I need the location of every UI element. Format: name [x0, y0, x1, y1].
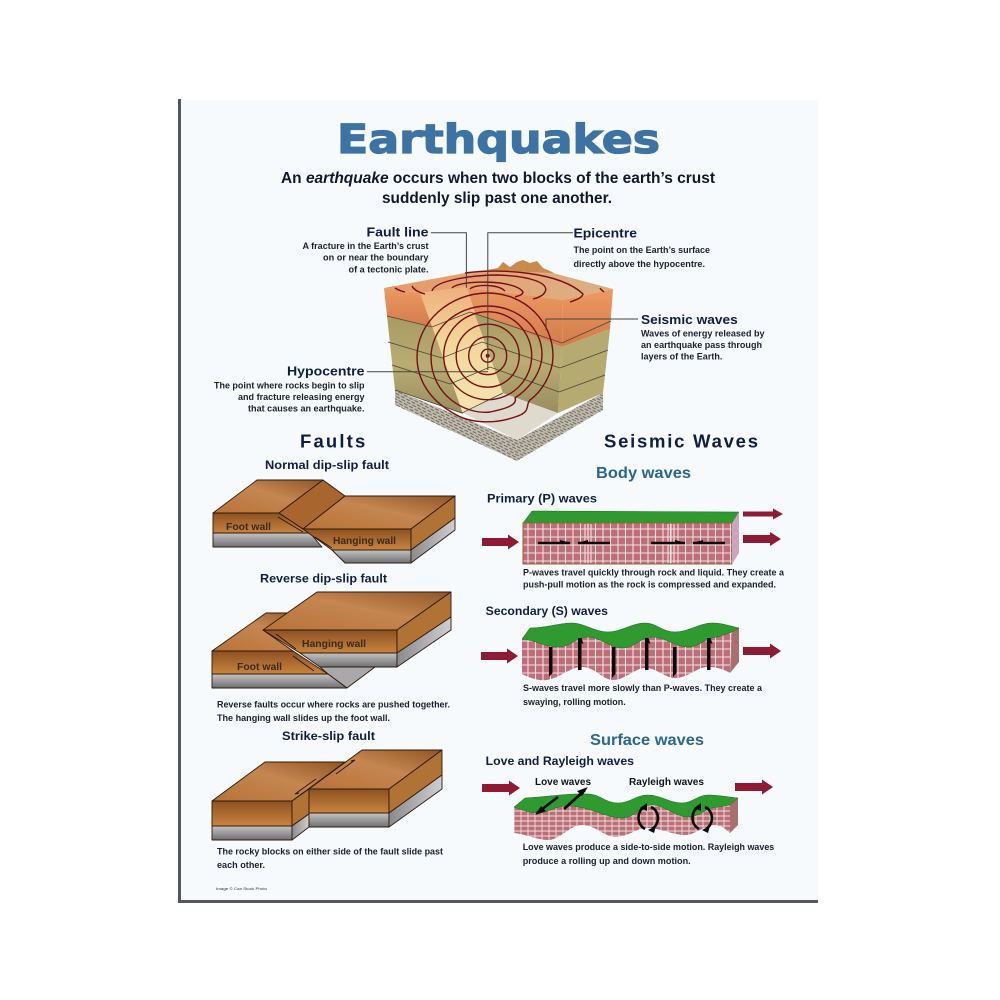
reverse dip-slip fault diagram	[212, 592, 451, 688]
bottom bedrock layer	[395, 390, 603, 461]
poster panel	[178, 99, 818, 903]
fault line callout: of a tectonic plate.	[348, 264, 428, 275]
hypocentre callout: and fracture releasing energy	[238, 392, 365, 403]
output arrow bottom	[743, 532, 781, 546]
input arrow	[481, 648, 518, 664]
hypocentre callout: Hypocentre	[287, 364, 364, 379]
output arrow	[743, 644, 781, 658]
fault line callout	[302, 225, 466, 288]
mountains on cube surface	[470, 260, 562, 286]
cube surface	[384, 270, 613, 300]
left outer wall	[384, 288, 463, 414]
P-wave description: push-pull motion as the rock is compressed and expanded.	[523, 580, 776, 591]
earthquake cube diagram	[384, 260, 613, 461]
hypocentre callout	[214, 364, 488, 415]
output arrow top	[743, 508, 783, 520]
seismic waves callout: Seismic waves	[641, 312, 738, 327]
reverse fault description: Reverse faults occur where rocks are pushed together.	[217, 700, 450, 711]
fault line callout: A fracture in the Earth’s crust	[302, 241, 429, 252]
epicentre callout: The point on the Earth’s surface	[574, 245, 710, 256]
strata lines	[387, 312, 611, 413]
secondary waves heading: Secondary (S) waves	[486, 606, 608, 618]
strike-slip description: The rocky blocks on either side of the fault slide past	[217, 846, 444, 857]
strike-slip description: each other.	[217, 860, 265, 871]
love waves label: Love waves	[535, 776, 591, 788]
intro text: An earthquake occurs when two blocks of the earth’s crust	[281, 170, 715, 187]
intro text	[281, 170, 715, 207]
love and rayleigh heading: Love and Rayleigh waves	[486, 756, 634, 768]
epicentre callout: directly above the hypocentre.	[574, 259, 705, 270]
surface waves heading: Surface waves	[590, 732, 704, 749]
inner right wall	[467, 287, 563, 413]
input arrow	[482, 534, 519, 550]
P-wave diagram	[482, 508, 783, 564]
S-wave diagram	[481, 623, 781, 680]
S-wave description: swaying, rolling motion.	[523, 697, 626, 708]
surface wave description: Love waves produce a side-to-side motion. Rayleigh waves	[523, 842, 774, 853]
input arrow	[482, 780, 520, 796]
fault line callout: Fault line	[366, 225, 428, 240]
S-wave description	[523, 683, 763, 708]
faults heading: Faults	[300, 430, 365, 451]
push-pull arrows	[538, 540, 725, 543]
hypocentre callout: The point where rocks begin to slip	[214, 380, 365, 391]
output arrow	[735, 780, 773, 794]
bedrock top face	[463, 393, 558, 440]
hanging wall label: Hanging wall	[302, 639, 366, 650]
seismic wave rings	[395, 271, 604, 422]
reverse fault description	[217, 700, 450, 724]
fault line callout: on or near the boundary	[323, 253, 429, 264]
seismic waves callout: layers of the Earth.	[641, 352, 722, 363]
epicentre callout: Epicentre	[574, 226, 637, 241]
fault plane	[420, 287, 503, 413]
surface wave description: produce a rolling up and down motion.	[523, 856, 691, 867]
foot wall label: Foot wall	[226, 522, 271, 533]
primary waves heading: Primary (P) waves	[487, 493, 597, 505]
shear arrows	[549, 638, 712, 678]
normal dip-slip fault diagram	[213, 480, 455, 563]
title: Earthquakes	[337, 117, 660, 163]
P-wave description	[523, 568, 785, 591]
strike-slip description	[217, 846, 444, 871]
reverse fault description: The hanging wall slides up the foot wall.	[217, 713, 390, 724]
reverse fault heading: Reverse dip-slip fault	[260, 573, 387, 585]
epicentre callout	[488, 226, 710, 370]
image credit: Image © Can Stock Photo	[216, 886, 268, 891]
S-wave description: S-waves travel more slowly than P-waves. They create a	[523, 683, 763, 694]
strike-slip fault diagram	[212, 750, 442, 840]
hanging wall label: Hanging wall	[333, 536, 396, 547]
rayleigh wave arrows	[638, 803, 712, 833]
seismic waves callout	[546, 312, 765, 363]
right outer wall	[558, 289, 613, 413]
P-wave description: P-waves travel quickly through rock and liquid. They create a	[523, 568, 785, 579]
seismic waves callout: an earthquake pass through	[641, 340, 762, 351]
hypocentre callout: that causes an earthquake.	[248, 404, 364, 415]
seismic waves heading: Seismic Waves	[604, 430, 758, 451]
rayleigh waves label: Rayleigh waves	[629, 776, 704, 788]
body waves heading: Body waves	[596, 465, 691, 482]
normal fault heading: Normal dip-slip fault	[265, 460, 389, 472]
foot wall label: Foot wall	[237, 662, 282, 673]
intro text: suddenly slip past one another.	[382, 190, 612, 207]
surface wave diagram	[482, 780, 773, 840]
love wave arrows	[535, 787, 588, 815]
seismic waves callout: Waves of energy released by	[641, 328, 765, 339]
strike-slip heading: Strike-slip fault	[282, 731, 375, 743]
surface wave description	[523, 842, 774, 867]
